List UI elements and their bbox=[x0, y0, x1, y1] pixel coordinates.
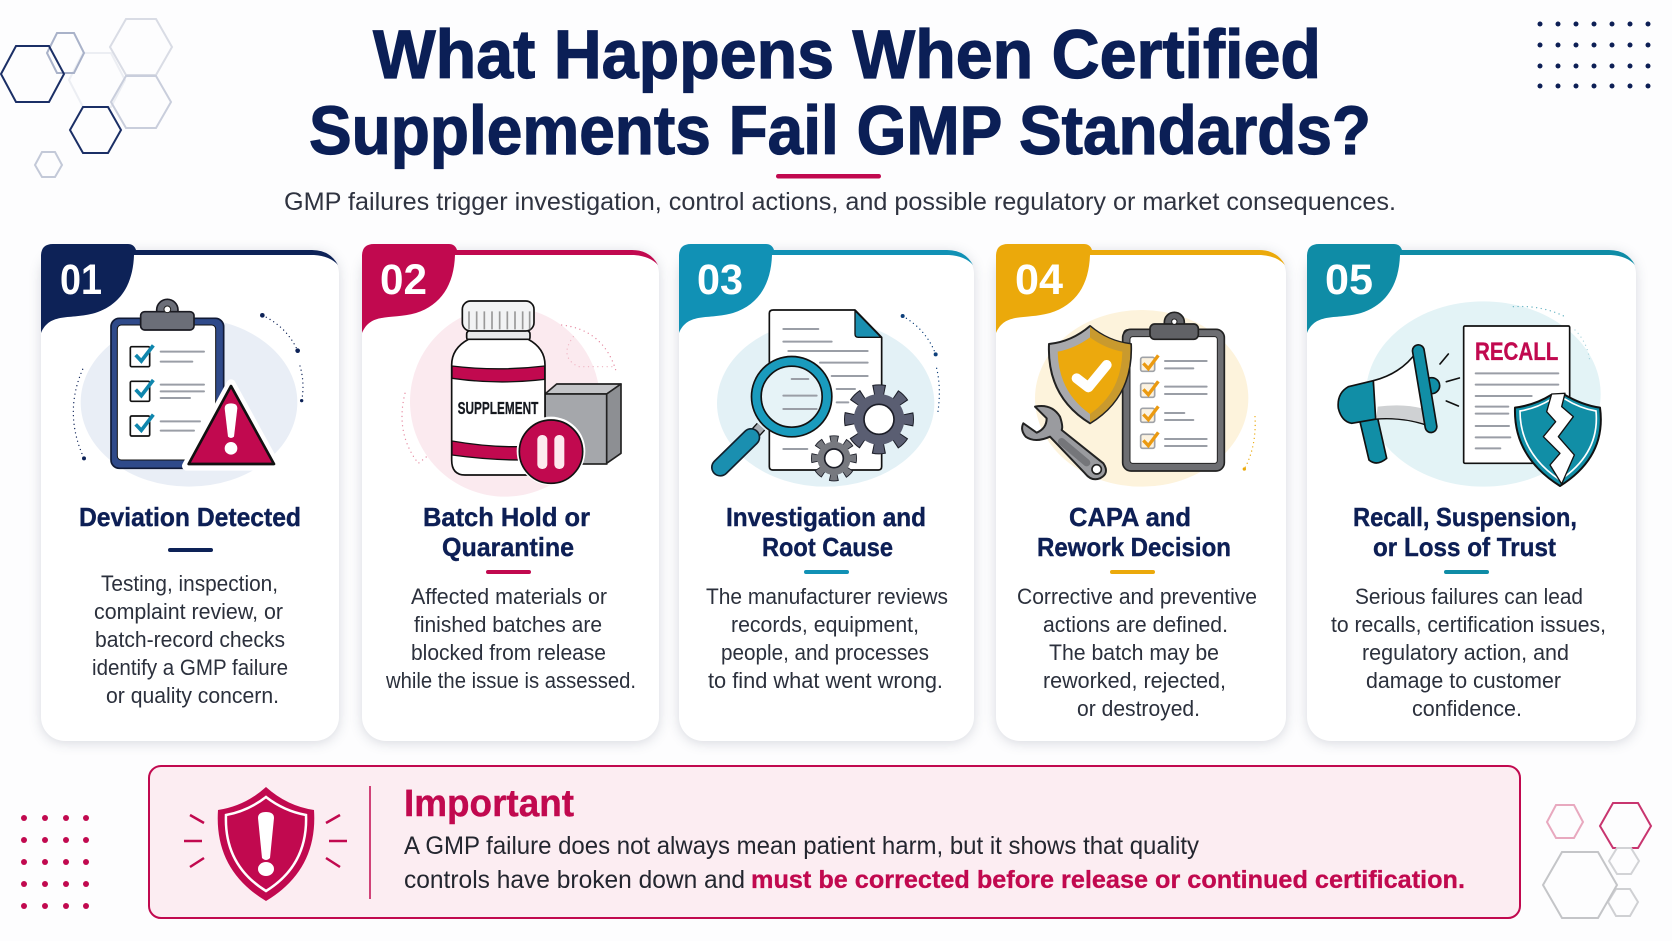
body text: actions are defined. bbox=[1043, 612, 1228, 637]
body text: finished batches are bbox=[414, 612, 602, 637]
number 01: 01 bbox=[60, 256, 102, 304]
body text: confidence. bbox=[1412, 696, 1522, 721]
title underline bbox=[776, 174, 881, 178]
accent rule bbox=[1110, 570, 1155, 574]
heading: Batch Hold or bbox=[423, 502, 590, 532]
accent rule bbox=[168, 548, 213, 552]
body text bbox=[385, 584, 636, 693]
body text: Testing, inspection, bbox=[101, 571, 278, 596]
decoration: hexagons bottom right bbox=[1543, 803, 1651, 918]
body text bbox=[92, 571, 288, 708]
number 02: 02 bbox=[380, 256, 427, 304]
bottle label: SUPPLEMENT bbox=[458, 398, 539, 418]
panel: 02 Batch Hold or Quarantine bbox=[362, 244, 659, 741]
body text: The manufacturer reviews bbox=[706, 584, 948, 609]
panel: 01 Deviation Detected bbox=[41, 244, 339, 741]
heading bbox=[726, 502, 926, 562]
callout text bbox=[404, 832, 1465, 894]
body text: reworked, rejected, bbox=[1043, 668, 1226, 693]
icon: magnifier, document and gears bbox=[717, 310, 939, 487]
body text: Affected materials or bbox=[411, 584, 607, 609]
heading: Deviation Detected bbox=[79, 502, 301, 532]
body text: identify a GMP failure bbox=[92, 655, 288, 680]
heading: CAPA and bbox=[1069, 502, 1191, 532]
number tab 03 bbox=[679, 244, 973, 333]
icon: warning shield bbox=[184, 787, 347, 901]
icon: clipboard with warning bbox=[73, 299, 303, 487]
body text: batch-record checks bbox=[95, 627, 285, 652]
number tab 05 bbox=[1307, 244, 1635, 333]
heading: or Loss of Trust bbox=[1373, 532, 1556, 562]
body text: while the issue is assessed. bbox=[385, 668, 636, 693]
heading: Rework Decision bbox=[1037, 532, 1231, 562]
number tab 02 bbox=[362, 244, 658, 333]
heading: Investigation and bbox=[726, 502, 926, 532]
heading bbox=[1037, 502, 1231, 562]
body text: Corrective and preventive bbox=[1017, 584, 1257, 609]
decoration: hexagons top left bbox=[1, 19, 172, 177]
title: Supplements Fail GMP Standards? bbox=[309, 92, 1371, 169]
heading: Recall, Suspension, bbox=[1353, 502, 1577, 532]
heading: Root Cause bbox=[762, 532, 893, 562]
title: What Happens When Certified bbox=[373, 16, 1321, 93]
body text: regulatory action, and bbox=[1362, 640, 1569, 665]
callout text: controls have broken down and bbox=[404, 866, 745, 894]
title bbox=[309, 16, 1371, 169]
number tab 01 bbox=[41, 244, 338, 333]
gear large bbox=[850, 390, 908, 449]
heading bbox=[1353, 502, 1577, 562]
icon: supplement bottle on hold bbox=[402, 301, 621, 497]
panel: 03 Investigation and Root Cause bbox=[679, 244, 974, 741]
accent rule bbox=[486, 570, 531, 574]
callout text: A GMP failure does not always mean patient harm, but it shows that quality bbox=[404, 832, 1199, 860]
body text: Serious failures can lead bbox=[1355, 584, 1583, 609]
panel: 04 CAPA and Rework Decision bbox=[996, 244, 1286, 741]
number 04: 04 bbox=[1015, 256, 1063, 304]
callout text: must be corrected before release or continued certification. bbox=[751, 866, 1465, 894]
heading bbox=[423, 502, 590, 562]
number 05: 05 bbox=[1325, 256, 1373, 304]
body text: records, equipment, bbox=[731, 612, 919, 637]
icon: shield, checklist and wrench bbox=[1022, 310, 1255, 487]
callout heading: Important bbox=[404, 783, 574, 825]
body text: complaint review, or bbox=[94, 599, 283, 624]
accent rule bbox=[804, 570, 849, 574]
callout: Important bbox=[149, 766, 1520, 918]
body text: or quality concern. bbox=[106, 683, 279, 708]
body text bbox=[1017, 584, 1257, 721]
heading: Quarantine bbox=[442, 532, 574, 562]
panel: 05 Recall, Suspension, or Loss of Trust bbox=[1307, 244, 1636, 741]
number tab 04 bbox=[996, 244, 1285, 333]
body text: to recalls, certification issues, bbox=[1331, 612, 1606, 637]
gear small bbox=[815, 439, 853, 477]
icon: megaphone, recall notice and broken shield bbox=[1338, 301, 1601, 487]
body text: damage to customer bbox=[1366, 668, 1561, 693]
accent rule bbox=[1444, 570, 1489, 574]
body text: to find what went wrong. bbox=[708, 668, 943, 693]
recall label: RECALL bbox=[1475, 338, 1558, 366]
subtitle: GMP failures trigger investigation, control actions, and possible regulatory or market consequences. bbox=[284, 188, 1396, 216]
decoration: dot grid top right bbox=[1538, 22, 1650, 88]
body text bbox=[706, 584, 948, 693]
decoration: dot grid bottom left bbox=[21, 815, 89, 909]
body text: people, and processes bbox=[721, 640, 929, 665]
number 03: 03 bbox=[697, 256, 743, 304]
body text bbox=[1331, 584, 1606, 721]
body text: or destroyed. bbox=[1077, 696, 1200, 721]
body text: The batch may be bbox=[1049, 640, 1219, 665]
body text: blocked from release bbox=[411, 640, 606, 665]
